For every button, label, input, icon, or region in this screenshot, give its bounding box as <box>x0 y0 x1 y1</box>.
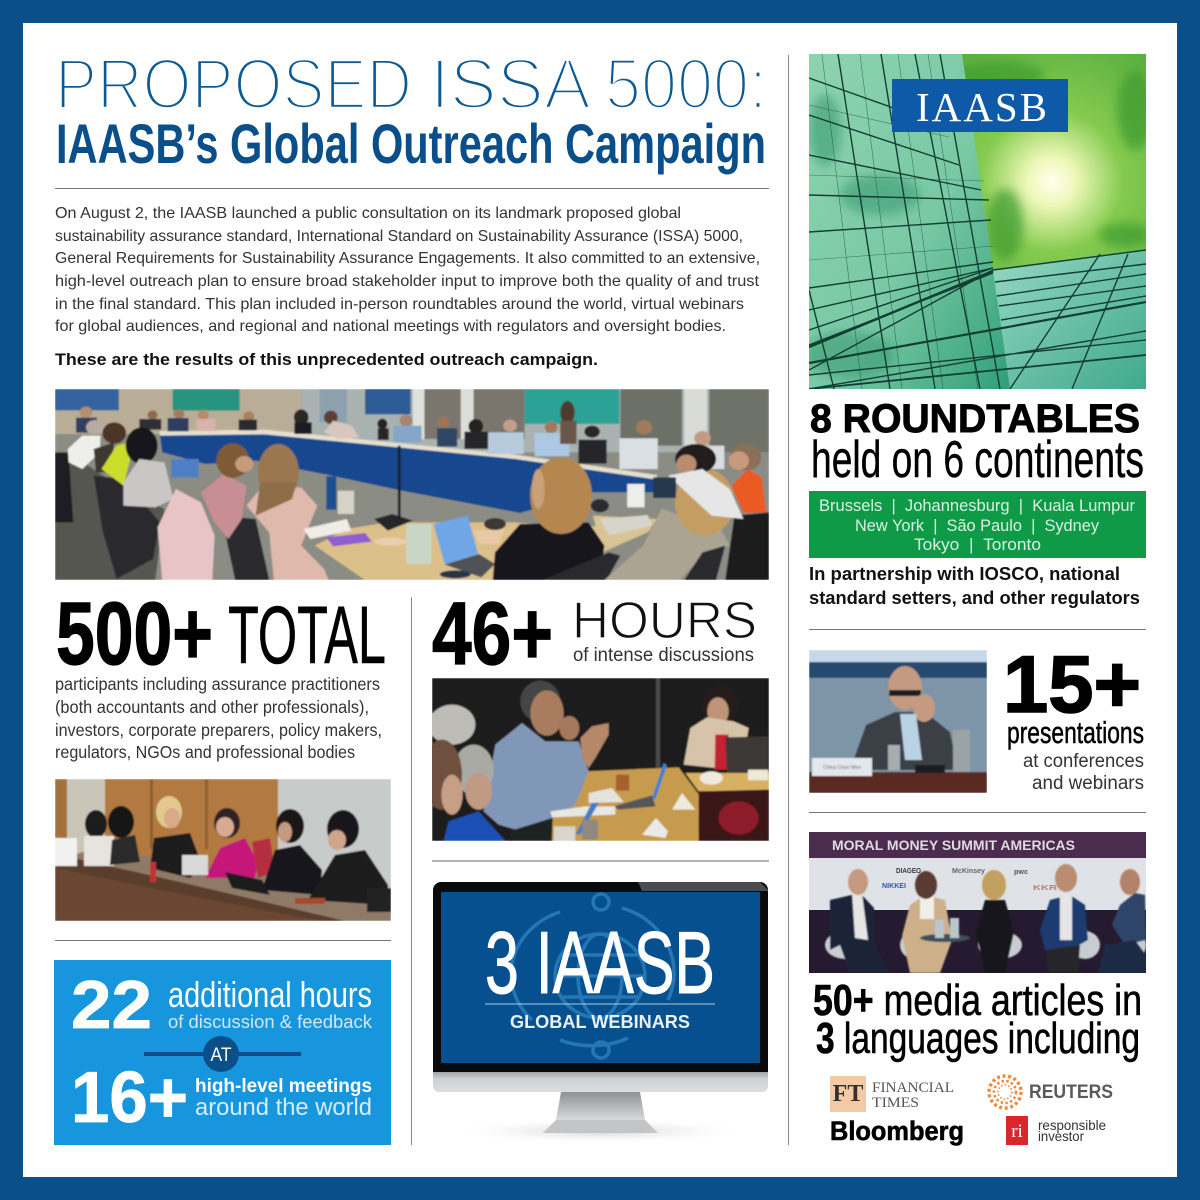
participants description: (both accountants and other professionals), <box>55 697 369 717</box>
title <box>55 46 767 175</box>
logo: Responsible Investor: investor <box>1038 1128 1084 1144</box>
stat: 46+ hours: of intense discussions <box>573 645 754 666</box>
intro text: These are the results of this unprecedented outreach campaign. <box>55 350 598 369</box>
intro text: sustainability assurance standard, International Standard on Sustainability Assurance (ISSA) 5000, <box>55 228 743 245</box>
panel: 22 hours and 16+ meetings: of discussion & feedback <box>168 1011 373 1032</box>
stat: 15+ presentations <box>1003 640 1144 794</box>
photo: discussion <box>432 678 769 841</box>
photo: Moral Money Summit panel: pwc <box>1014 869 1028 876</box>
logo: IAASB: IAASB <box>916 84 1047 130</box>
stat: 500+ total: TOTAL <box>228 590 386 681</box>
photo: glass building and trees <box>809 54 1146 389</box>
logo: IAASB <box>892 79 1068 132</box>
title: IAASB’s Global Outreach Campaign <box>56 112 766 175</box>
stat: 22: 22 <box>71 967 152 1043</box>
photo: presenter: China Chun Wee <box>823 765 861 771</box>
panel: roundtable cities: Brussels | Johannesburg | Kuala Lumpur <box>819 496 1135 515</box>
intro text: in the final standard. This plan included in-person roundtables around the world, virtual webinars <box>55 296 744 313</box>
intro text: On August 2, the IAASB launched a public consultation on its landmark proposed global <box>55 205 681 222</box>
text: partnership <box>809 564 1140 608</box>
intro text <box>55 205 760 369</box>
text: partnership: standard setters, and other regulators <box>809 588 1140 608</box>
heading: 50+ media articles <box>813 976 1142 1063</box>
intro text: high-level outreach plan to ensure broad stakeholder input to improve both the quality of and trust <box>55 273 760 290</box>
stat: 15+ presentations: and webinars <box>1032 773 1144 794</box>
stat: 500+ total: 500+ <box>56 583 213 683</box>
participants description: participants including assurance practitioners <box>55 674 380 694</box>
photo: roundtable room <box>55 389 769 580</box>
photo: Moral Money Summit panel: NIKKEI <box>882 883 906 890</box>
title: PROPOSED <box>55 46 412 124</box>
logo: Financial Times: FINANCIAL <box>872 1080 954 1096</box>
stat: 46+ hours: 46+ <box>432 583 553 683</box>
panel: 22 hours and 16+ meetings <box>54 960 391 1145</box>
participants description: investors, corporate preparers, policy makers, <box>55 720 382 740</box>
monitor stand <box>556 1092 645 1120</box>
panel: roundtable cities: New York | São Paulo | Sydney <box>855 516 1099 535</box>
logo: Responsible Investor: responsible <box>1038 1117 1106 1133</box>
stat: 500+ total <box>56 583 386 683</box>
heading: 8 roundtables <box>810 397 1144 489</box>
logo: Responsible Investor: ri <box>1011 1121 1023 1142</box>
panel: roundtable cities <box>809 491 1146 558</box>
icon: AT circle: AT <box>210 1045 232 1066</box>
photo: Moral Money Summit panel <box>809 832 1146 973</box>
stat: 15+ presentations: 15+ <box>1003 640 1141 730</box>
panel: roundtable cities: Tokyo | Toronto <box>914 535 1041 554</box>
logo: Financial Times <box>830 1076 954 1112</box>
panel: 22 hours and 16+ meetings: around the world <box>195 1094 372 1121</box>
text: high-level meetings: high-level meetings <box>195 1076 372 1097</box>
icon: globe watermark <box>511 894 674 1058</box>
heading: 8 roundtables: 8 ROUNDTABLES <box>810 397 1140 441</box>
right foreground people <box>493 522 604 580</box>
logo: Reuters: REUTERS <box>1029 1082 1113 1103</box>
logo: Reuters <box>989 1076 1113 1108</box>
title: ISSA <box>430 46 592 124</box>
logo: Bloomberg: Bloomberg <box>830 1116 964 1146</box>
stat: 15+ presentations: at conferences <box>1023 751 1144 772</box>
text: additional hours: additional hours <box>168 974 372 1015</box>
monitor: 3 IAASB global webinars <box>433 882 768 1144</box>
stat: 46+ hours <box>432 583 757 683</box>
intro text: for global audiences, and regional and national meetings with regulators and oversight bodies. <box>55 318 726 335</box>
text: global webinars: GLOBAL WEBINARS <box>510 1011 690 1032</box>
photo: Moral Money Summit panel: MORAL MONEY SUMMIT AMERICAS <box>832 838 1075 853</box>
photo: Moral Money Summit panel: McKinsey <box>952 868 985 875</box>
text: 3 IAASB: 3 IAASB <box>485 913 715 1012</box>
stat: 15+ presentations: presentations <box>1007 715 1144 750</box>
icon: AT circle <box>203 1036 239 1072</box>
stat: 16+: 16+ <box>71 1058 188 1138</box>
participants description: regulators, NGOs and professional bodies <box>55 742 355 762</box>
logo: Responsible Investor <box>1006 1116 1106 1145</box>
photo: Moral Money Summit panel: KKR <box>1033 885 1057 892</box>
photo: presenter <box>809 650 987 793</box>
photo: Moral Money Summit panel: DIAGEO <box>896 868 921 875</box>
heading: 50+ media articles: 50+ media articles in <box>813 976 1142 1025</box>
left chairs and people <box>55 452 164 580</box>
stat: 46+ hours: HOURS <box>572 592 757 650</box>
far row of people <box>76 401 724 469</box>
title: 5000: <box>605 46 767 124</box>
intro text: General Requirements for Sustainability Assurance Engagements. It also committed to an extensive, <box>55 250 760 267</box>
text: partnership: In partnership with IOSCO, national <box>809 564 1120 584</box>
participants description <box>55 674 382 762</box>
photo: panel table <box>55 779 391 921</box>
logo: Financial Times: FT <box>833 1081 863 1107</box>
logo: Financial Times: TIMES <box>872 1095 919 1111</box>
